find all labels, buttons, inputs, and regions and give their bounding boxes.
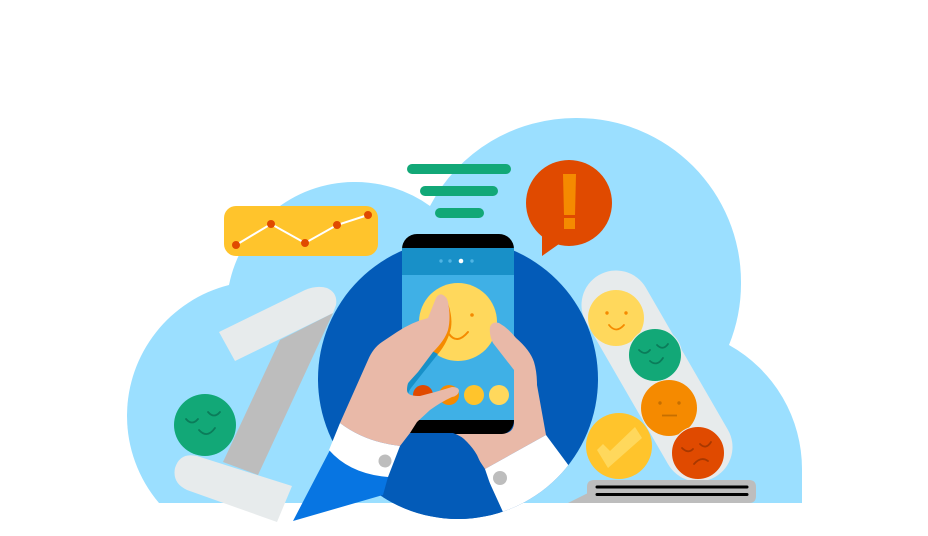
left cuff button	[378, 454, 392, 468]
illustration: hands rating on a phone	[127, 118, 802, 522]
icon: orange neutral face	[641, 380, 697, 436]
icon: alert speech bubble	[526, 160, 612, 256]
icon: red sad face	[672, 426, 724, 480]
icon: yellow check badge	[586, 413, 652, 479]
cloud background	[127, 118, 802, 503]
light blue sleeve	[293, 450, 388, 521]
icon: happy yellow face	[588, 290, 644, 346]
right hand	[453, 322, 546, 469]
icon: yellow smiley on screen	[419, 283, 497, 361]
right cuff button	[493, 471, 507, 485]
left cuff	[329, 423, 400, 477]
central blue circle	[318, 239, 598, 519]
rating dots	[413, 385, 509, 405]
icon: message lines	[407, 164, 511, 218]
right hand with sleeve	[383, 322, 572, 525]
right cuff	[485, 435, 568, 512]
left hand with sleeve	[293, 294, 459, 521]
icon: green sleepy face	[174, 394, 236, 456]
tray	[568, 480, 756, 503]
right rating tube	[586, 290, 724, 480]
dark sleeve	[383, 433, 503, 525]
panel: line chart card	[224, 206, 378, 256]
page indicator dots	[439, 259, 474, 263]
icon: smartphone	[402, 234, 514, 435]
icon: green content face	[628, 328, 682, 382]
left stand with green face	[174, 287, 336, 522]
left hand	[340, 294, 459, 446]
thumb shadow	[430, 298, 451, 354]
